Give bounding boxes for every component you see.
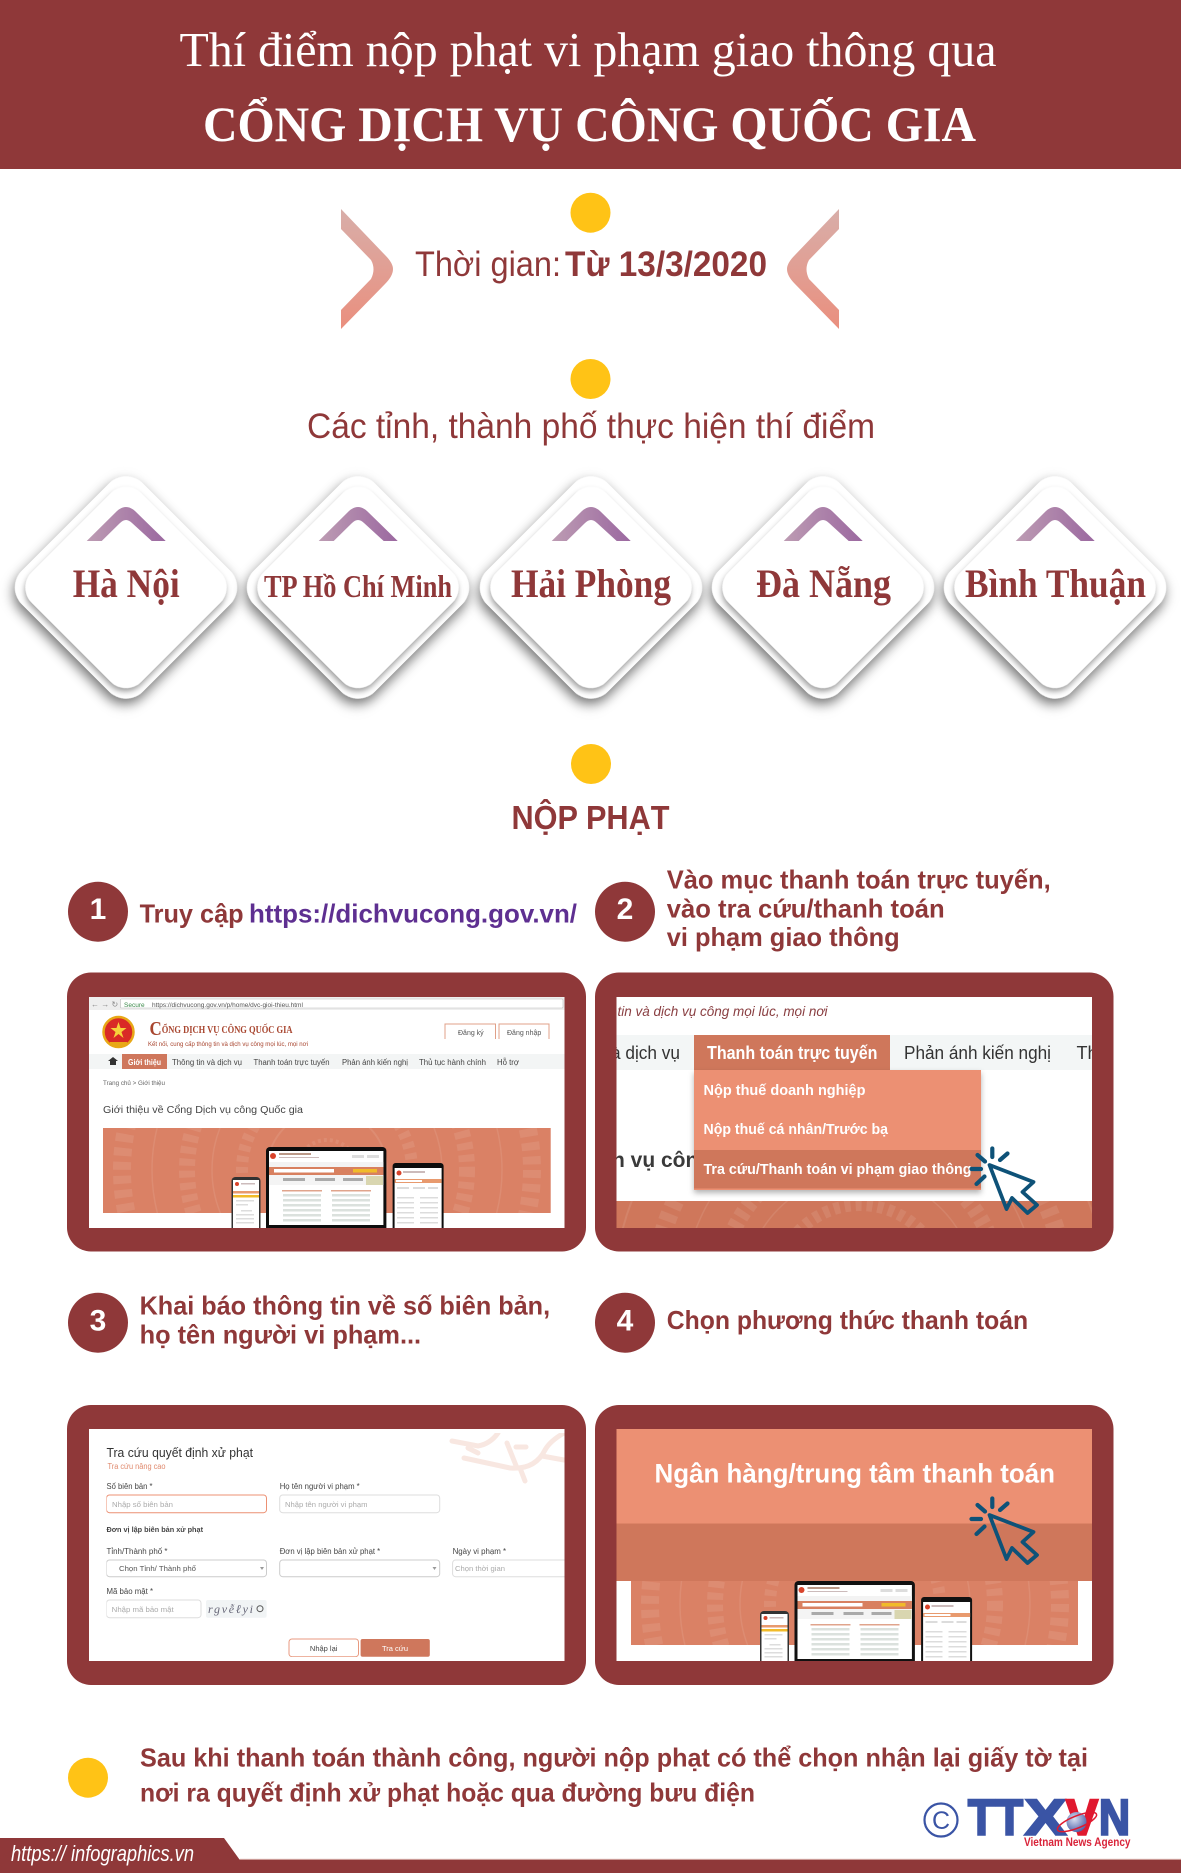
- browser bar: [89, 997, 564, 1010]
- portal name: ỔNG DỊCH VỤ CÔNG QUỐC GIA: [162, 1023, 293, 1036]
- navigation bar: Thủ: [1076, 1043, 1108, 1063]
- login buttons: Đăng nhập: [507, 1030, 541, 1037]
- icon: cursor: [972, 1498, 1037, 1563]
- copyright mark: [924, 1804, 958, 1836]
- navigation bar: à dịch vụ: [611, 1043, 680, 1063]
- panel: step 4 payment screenshot: [595, 1405, 1114, 1685]
- login buttons: [445, 1024, 549, 1039]
- step 3 text: [140, 1290, 550, 1349]
- banner: [631, 1581, 1078, 1645]
- form title: Tra cứu quyết định xử phạt: [106, 1446, 254, 1460]
- time text: [415, 245, 767, 284]
- step 1 badge: [68, 882, 128, 942]
- navigation: Thông tin và dịch vụ: [172, 1058, 242, 1067]
- unit subheading: Đơn vị lập biên bản xử phạt: [106, 1525, 203, 1534]
- yellow dot: closing note: [68, 1758, 108, 1798]
- form buttons: [289, 1639, 430, 1657]
- security code: [106, 1587, 267, 1618]
- step 1 text: https://dichvucong.gov.vn/: [249, 899, 577, 929]
- row 2 fields: Ngày vi phạm *: [453, 1547, 506, 1556]
- diamond: TP Hồ Chí Minh: TP Hồ Chí Minh: [264, 568, 452, 604]
- row 2 fields: Chọn Tỉnh/ Thành phố: [119, 1564, 197, 1573]
- step 2 badge: 2: [617, 893, 633, 926]
- step 1 text: Truy cập: [140, 899, 244, 929]
- title line 2: CỔNG DỊCH VỤ CÔNG QUỐC GIA: [203, 95, 976, 152]
- dropdown menu: Tra cứu/Thanh toán vi phạm giao thông: [704, 1161, 972, 1178]
- step 4 badge: 4: [617, 1304, 634, 1338]
- decorative bird: [452, 1433, 564, 1481]
- step 2 text: vào tra cứu/thanh toán: [667, 894, 945, 924]
- row 2 fields: [106, 1547, 583, 1577]
- row 1 fields: Số biên bản *: [106, 1482, 152, 1491]
- navigation bar: Phản ánh kiến nghị: [904, 1043, 1051, 1063]
- portal name: Kết nối, cung cấp thông tin và dịch vụ công mọi lúc, mọi nơi: [148, 1042, 308, 1048]
- banner: [103, 1128, 551, 1213]
- step 3 badge: [68, 1293, 128, 1353]
- step 2 badge: [595, 882, 655, 942]
- dark band: [616, 1524, 1092, 1581]
- wordmark: T: [968, 1790, 995, 1846]
- dropdown menu: Nộp thuế cá nhân/Trước bạ: [704, 1121, 889, 1138]
- diamond: Đà Nẵng: Đà Nẵng: [756, 561, 891, 606]
- navigation: [89, 1054, 564, 1069]
- row 2 fields: Chọn thời gian: [455, 1564, 505, 1573]
- panel: step 3 form screenshot: [67, 1405, 586, 1685]
- diamond: Bình Thuận: Bình Thuận: [965, 561, 1146, 606]
- diamond: Hà Nội: Hà Nội: [73, 561, 180, 606]
- copyright mark: C: [932, 1807, 950, 1835]
- footer bar: [0, 1838, 1181, 1873]
- time text: Từ 13/3/2020: [565, 245, 767, 284]
- form title: Tra cứu nâng cao: [108, 1462, 166, 1471]
- navigation: Thanh toán trực tuyến: [254, 1058, 330, 1067]
- footer url: https:// infographics.vn: [11, 1841, 194, 1866]
- login buttons: Đăng ký: [458, 1030, 484, 1037]
- logo: TTXVN: [924, 1790, 1131, 1849]
- diamond: Bình Thuận: [934, 467, 1176, 708]
- browser bar: ← → ↻: [91, 1000, 118, 1009]
- navigation: Phản ánh kiến nghị: [342, 1058, 408, 1067]
- browser bar: Secure: [124, 1002, 145, 1009]
- step 1 badge: 1: [90, 893, 106, 926]
- browser bar: https://dichvucong.gov.vn/p/home/dvc-gioi-thieu.html: [152, 1002, 303, 1009]
- closing note: [140, 1743, 1088, 1808]
- section heading: NỘP PHẠT: [512, 798, 670, 836]
- diamond: TP Hồ Chí Minh: [237, 467, 479, 708]
- row 2 fields: Tỉnh/Thành phố *: [106, 1547, 168, 1556]
- panel: step 1 screenshot: [67, 972, 586, 1252]
- navigation bar: [611, 1035, 1108, 1070]
- globe: [1055, 1809, 1099, 1835]
- step 3 text: Khai báo thông tin về số biên bản,: [140, 1290, 550, 1320]
- left chevron: [341, 209, 393, 329]
- portal name: [148, 1022, 308, 1048]
- step 3 badge: 3: [90, 1304, 106, 1338]
- partial heading: n vụ công: [612, 1149, 711, 1172]
- closing note: nơi ra quyết định xử phạt hoặc qua đường bưu điện: [140, 1778, 755, 1808]
- row 2 fields: Đơn vị lập biên bản xử phạt *: [280, 1547, 380, 1556]
- wordmark: [968, 1790, 1130, 1846]
- header banner: [0, 0, 1181, 169]
- step 2 text: [667, 864, 1051, 952]
- provinces heading: Các tỉnh, thành phố thực hiện thí điểm: [307, 407, 875, 446]
- step 2 text: Vào mục thanh toán trực tuyến,: [667, 864, 1051, 894]
- wordmark: T: [996, 1790, 1023, 1846]
- payment heading: Ngân hàng/trung tâm thanh toán: [654, 1459, 1055, 1489]
- step 3 text: họ tên người vi phạm...: [140, 1319, 421, 1349]
- row 1 fields: Nhập tên người vi phạm: [285, 1500, 368, 1509]
- wordmark: X: [1025, 1790, 1066, 1846]
- icon: national emblem: [104, 1017, 134, 1047]
- dropdown menu: [694, 1070, 981, 1190]
- title line 1: Thí điểm nộp phạt vi phạm giao thông qua: [180, 22, 997, 77]
- row 1 fields: Họ tên người vi phạm *: [280, 1482, 360, 1491]
- agency name: Vietnam News Agency: [1024, 1837, 1131, 1849]
- diamond: Hải Phòng: Hải Phòng: [511, 561, 671, 606]
- diamond: Đà Nẵng: [702, 467, 944, 708]
- closing note: Sau khi thanh toán thành công, người nộp phạt có thể chọn nhận lại giấy tờ tại: [140, 1743, 1088, 1773]
- banner: [616, 1201, 1092, 1228]
- breadcrumb: Trang chủ > Giới thiệu: [103, 1079, 165, 1087]
- navigation: Giới thiệu: [128, 1058, 161, 1067]
- security code: Mã bảo mật *: [106, 1587, 153, 1596]
- wordmark: N: [1099, 1790, 1130, 1846]
- slogan: tin và dịch vụ công mọi lúc, mọi nơi: [618, 1004, 828, 1019]
- portal name: C: [150, 1018, 162, 1040]
- dropdown menu: Nộp thuế doanh nghiệp: [704, 1082, 866, 1099]
- form title: [106, 1446, 254, 1471]
- step 4 text: Chọn phương thức thanh toán: [667, 1305, 1028, 1335]
- security code: rgvễℓyi: [208, 1602, 253, 1616]
- panel: step 2 screenshot: [595, 972, 1114, 1252]
- time text: Thời gian:: [415, 245, 561, 284]
- heading band: [616, 1429, 1092, 1524]
- navigation: Hỗ trợ: [497, 1058, 520, 1067]
- yellow dot: time: [570, 193, 610, 233]
- step 2 text: vi phạm giao thông: [667, 922, 900, 952]
- form buttons: Tra cứu: [382, 1644, 408, 1653]
- right chevron: [787, 209, 839, 329]
- row 1 fields: [106, 1482, 440, 1513]
- yellow dot: provinces: [570, 359, 610, 399]
- navigation bar: Thanh toán trực tuyến: [707, 1043, 878, 1063]
- yellow dot: payment: [571, 744, 611, 784]
- form buttons: Nhập lại: [310, 1644, 338, 1653]
- page heading: Giới thiệu về Cổng Dịch vụ công Quốc gia: [103, 1104, 303, 1116]
- security code: Nhập mã bảo mật: [112, 1605, 175, 1614]
- wordmark: V: [1066, 1790, 1099, 1846]
- navigation: Thủ tục hành chính: [419, 1058, 486, 1067]
- diamond: Hải Phòng: [470, 467, 712, 708]
- devices mockup: [232, 1147, 444, 1237]
- diamond: Hà Nội: [5, 467, 247, 708]
- icon: cursor: [972, 1148, 1037, 1213]
- devices mockup: [760, 1581, 972, 1661]
- step 4 badge: [595, 1293, 655, 1353]
- row 1 fields: Nhập số biên bản: [112, 1500, 173, 1509]
